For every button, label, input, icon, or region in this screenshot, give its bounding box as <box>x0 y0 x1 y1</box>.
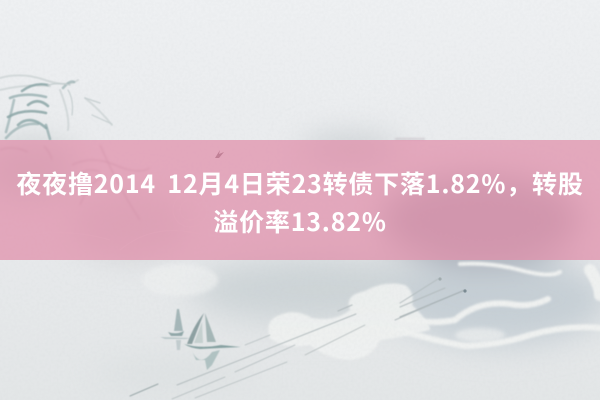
clouds: right bands <box>400 264 600 346</box>
mountains: left ink peaks <box>0 75 112 139</box>
title: 夜夜撸2014 12月4日荣23转债下落1.82%，转股 <box>16 165 584 201</box>
clouds: pale band outlines <box>0 193 260 250</box>
ink wash: lower sky <box>0 136 600 391</box>
clouds: lower left faint puffs <box>142 264 505 342</box>
icon: large sailboat <box>184 313 241 370</box>
clouds: central swirl <box>268 283 430 360</box>
title <box>16 165 584 239</box>
bird <box>215 150 224 158</box>
mountains: ink inside band <box>0 139 425 220</box>
title: 溢价率13.82% <box>213 203 387 239</box>
diagonal rigging lines <box>130 279 465 399</box>
pink title band <box>0 140 600 260</box>
boats <box>160 309 241 370</box>
icon: small sailboat <box>160 309 190 350</box>
